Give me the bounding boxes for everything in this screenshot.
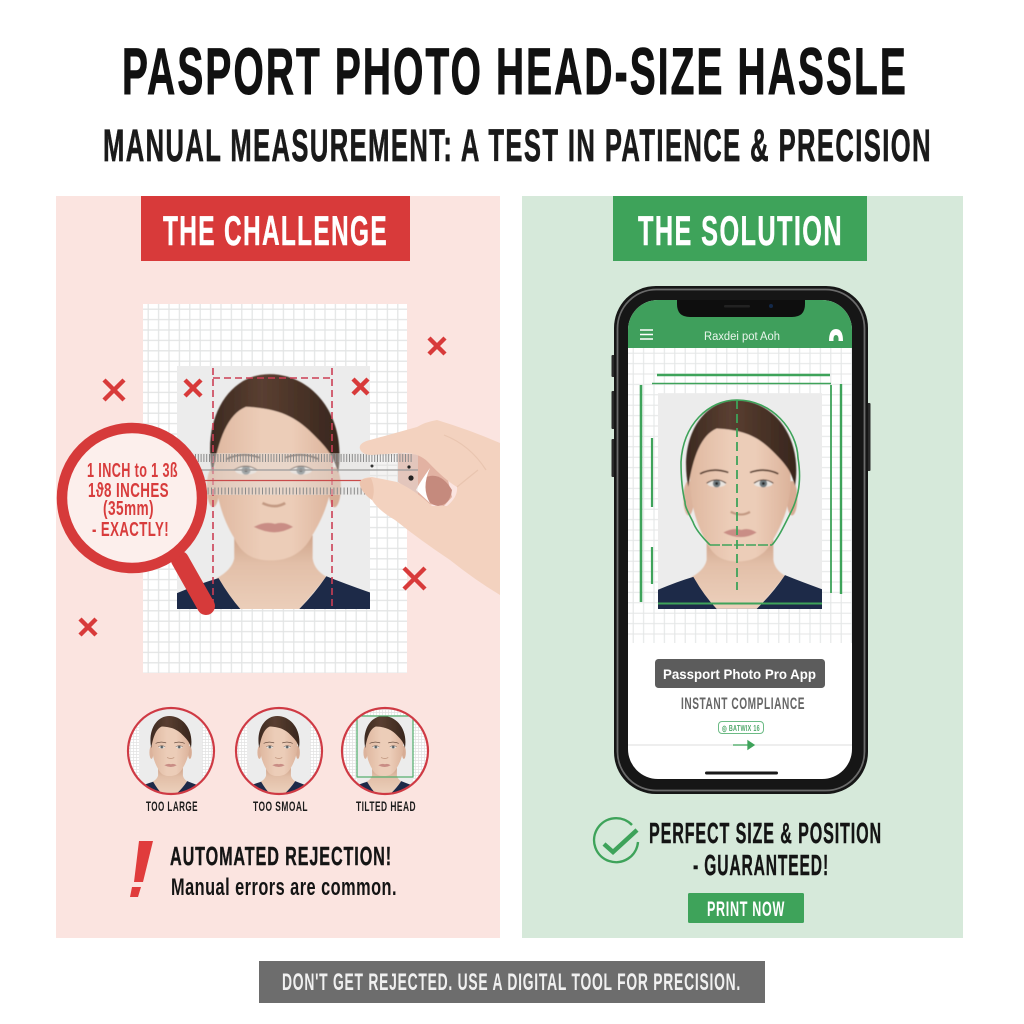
magnifying glass callout: 1 INCH to 1 3ß — [87, 460, 178, 482]
magnifying glass callout: (35mm) — [103, 498, 154, 520]
footer banner — [259, 961, 765, 1003]
thumbnail: tilted head: TILTED HEAD — [356, 798, 416, 814]
app name pill: Passport Photo Pro App — [663, 666, 816, 682]
arrow — [733, 741, 754, 749]
rejection warning text — [170, 841, 397, 901]
green alignment guides — [641, 375, 841, 604]
heading: the challenge: THE CHALLENGE — [163, 207, 388, 254]
thumbnail: too small: TOO SMOAL — [253, 798, 308, 814]
passport photo being measured — [177, 366, 370, 609]
app header — [628, 300, 852, 348]
magnifying glass callout: 1ϑ8 INCHES — [88, 480, 169, 502]
ruler — [188, 453, 418, 495]
guarantee text: - GUARANTEED! — [693, 850, 829, 882]
instant compliance label: INSTANT COMPLIANCE — [681, 694, 805, 713]
heading: the solution — [613, 196, 867, 261]
compliant passport photo — [658, 393, 822, 609]
thumbnail: too large: TOO LARGE — [146, 798, 198, 814]
thumbnail: too large — [128, 708, 214, 814]
app header: Raxdei pot Aoh — [704, 331, 780, 343]
panel: the solution — [522, 196, 963, 938]
magnifying glass callout: - EXACTLY! — [92, 519, 169, 541]
rejection warning text: Manual errors are common. — [171, 874, 397, 901]
compliance badge: ◎ BATWIX 16 — [722, 724, 760, 733]
heading: the solution: THE SOLUTION — [638, 207, 843, 254]
heading: the challenge — [141, 196, 410, 261]
guarantee text — [649, 818, 882, 882]
print now button: PRINT NOW — [707, 898, 785, 921]
compliance badge — [718, 722, 764, 734]
icon: check circle — [594, 818, 638, 862]
home indicator — [705, 772, 778, 774]
thumbnail: tilted head — [342, 708, 428, 814]
finger behind ruler — [398, 453, 452, 506]
panel: the challenge — [56, 196, 500, 938]
dashed head-size guide — [213, 368, 332, 609]
grid paper — [143, 304, 407, 673]
grid background — [628, 348, 852, 643]
icon: exclamation mark — [130, 841, 153, 897]
red x marks — [80, 338, 445, 635]
hand holding ruler — [360, 420, 500, 595]
phone notch — [677, 300, 805, 317]
magnifying glass callout — [62, 428, 206, 606]
print now button — [688, 893, 804, 923]
app name pill — [655, 659, 825, 688]
phone mockup — [612, 286, 870, 794]
thumbnail: too small — [236, 708, 322, 814]
rejection warning text: AUTOMATED REJECTION! — [170, 841, 392, 871]
